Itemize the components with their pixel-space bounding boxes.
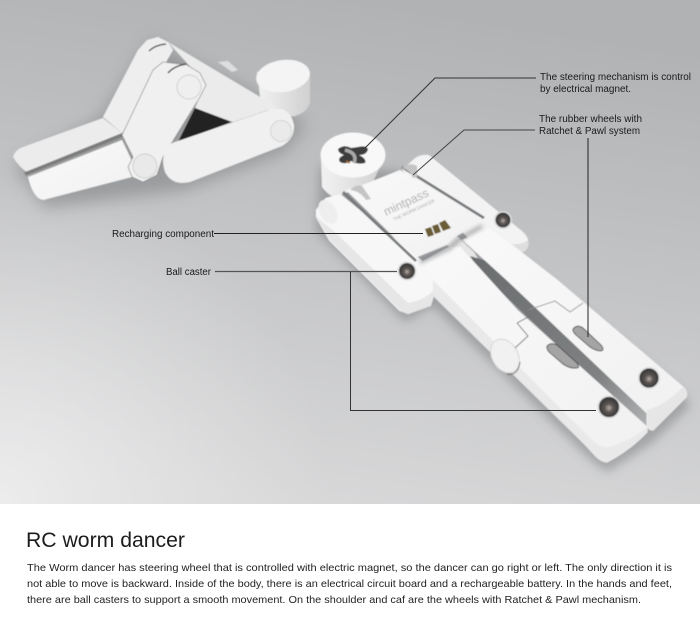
callout: ball caster: Ball caster — [166, 267, 212, 278]
photo background — [0, 0, 700, 504]
callout: steering mechanism — [365, 72, 691, 148]
rubber wheel — [573, 326, 603, 351]
callout: steering mechanism: The steering mechanism is control — [540, 72, 691, 83]
robot figure lying flat — [315, 132, 690, 472]
recharging contacts — [425, 220, 451, 237]
near thigh — [122, 62, 206, 182]
description text: not able to move is backward. Inside of the body, there is an electrical circuit board and a rechargeable battery. In the hands and feet, — [27, 578, 672, 590]
callout: rubber wheels: The rubber wheels with — [539, 114, 642, 125]
near lower leg — [28, 140, 133, 200]
callout: steering mechanism: by electrical magnet. — [540, 84, 631, 95]
neck link — [447, 236, 486, 272]
rubber wheel — [547, 344, 578, 368]
shadow — [14, 40, 306, 208]
far upper leg — [103, 37, 173, 133]
dark gap — [178, 108, 231, 142]
left leg — [422, 247, 647, 462]
folded head — [254, 56, 312, 116]
left arm — [315, 192, 437, 314]
brand mark: mintpass — [381, 186, 431, 219]
folded robot figure — [13, 37, 312, 208]
far lower leg — [13, 118, 122, 172]
head — [320, 132, 386, 197]
torso edge shadow — [420, 226, 482, 262]
callout: recharging component: Recharging component — [112, 229, 214, 240]
callout: ball caster — [166, 267, 596, 410]
callout: rubber wheels — [413, 114, 642, 337]
description text: The Worm dancer has steering wheel that is controlled with electric magnet, so the dancer can go right or left. The only direction it is — [27, 562, 672, 574]
right leg — [463, 228, 687, 430]
leg groove — [470, 256, 652, 430]
right arm — [402, 155, 529, 254]
shadow — [316, 166, 690, 472]
title: RC worm dancer — [26, 529, 185, 552]
torso: THE WORM DANCER — [392, 198, 436, 222]
callout: rubber wheels: Ratchet & Pawl system — [539, 126, 640, 137]
arm — [163, 109, 294, 183]
torso — [346, 164, 484, 258]
description text: there are ball casters to support a smooth movement. On the shoulder and caf are the wheels with Ratchet & Pawl mechanism. — [27, 594, 641, 606]
steering slot — [338, 146, 368, 164]
hip joint — [485, 334, 525, 378]
folded torso — [168, 42, 277, 122]
